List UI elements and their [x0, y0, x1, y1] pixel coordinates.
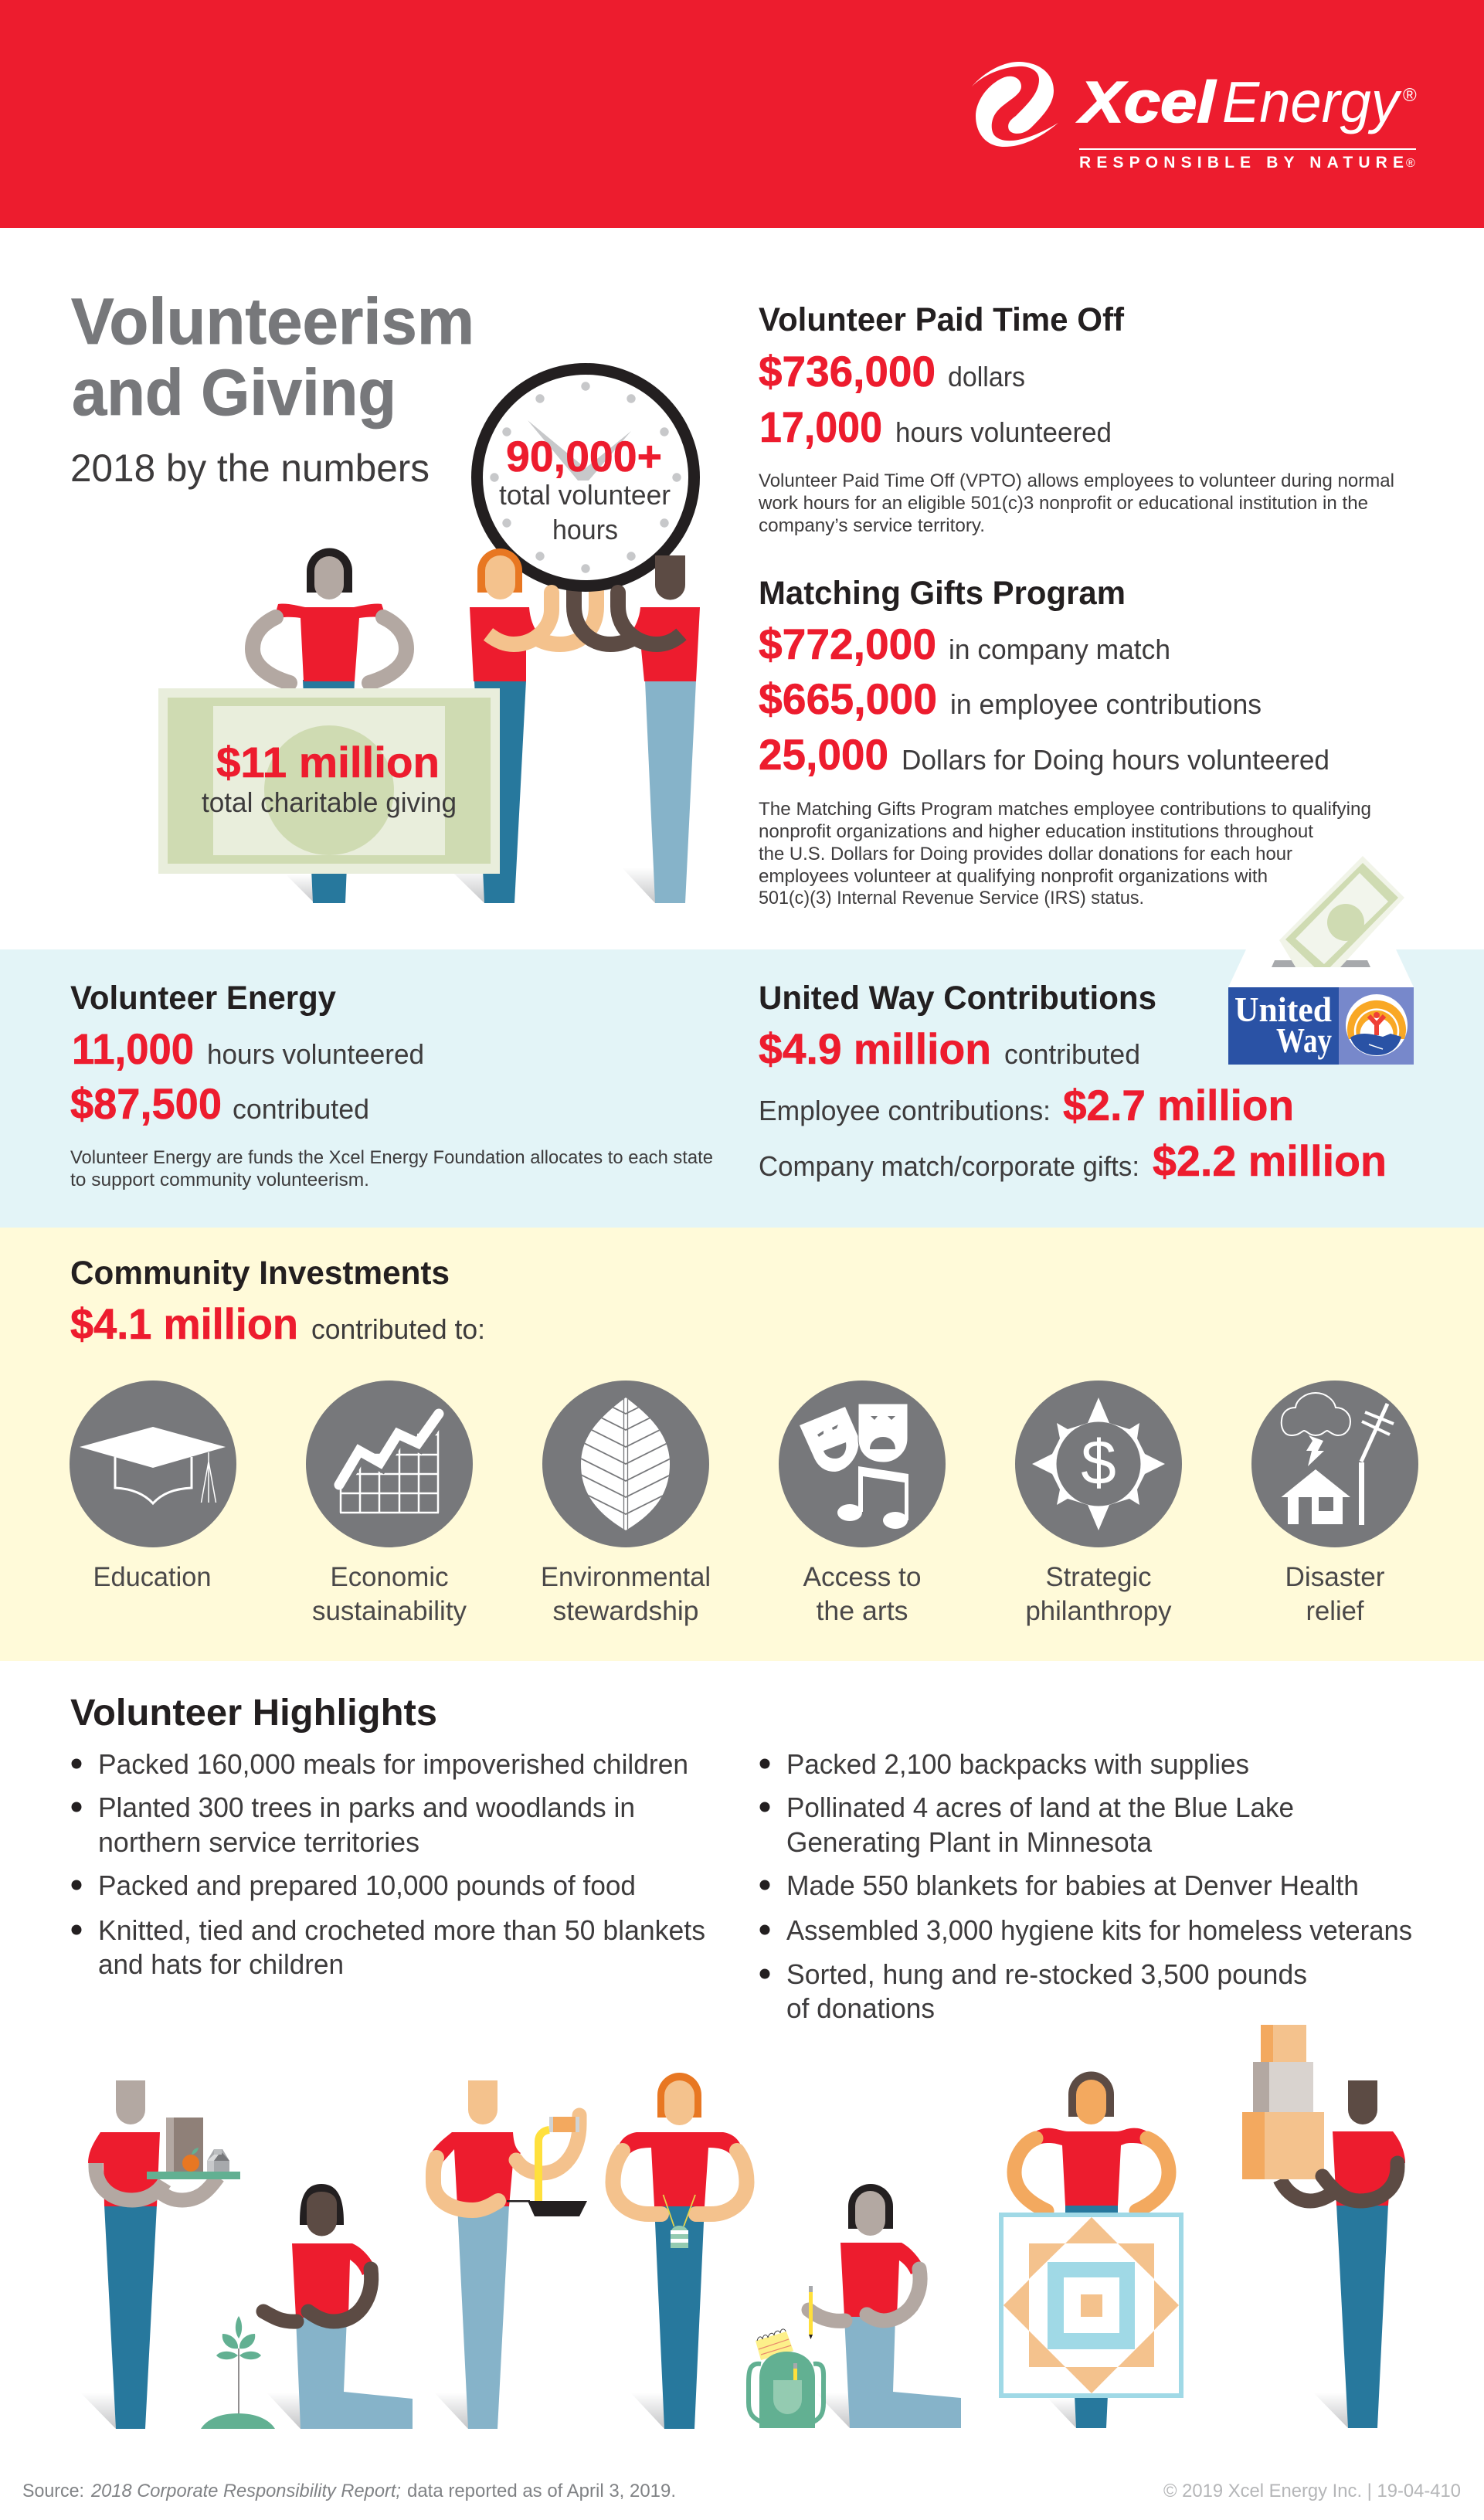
icon: can pouring into pan [507, 2117, 587, 2216]
icon: Environmental stewardship [542, 1381, 709, 1547]
icon: ballot box with United Way logo: Way [1276, 1021, 1332, 1060]
text block: Volunteer Energy: Volunteer Energy are funds the Xcel Energy Foundation allocates to each state [70, 1147, 713, 1168]
list: highlights right column: Generating Plant in Minnesota [786, 1826, 1153, 1858]
title: Volunteerism [71, 285, 474, 358]
labels: contribution categories: Strategic [1046, 1562, 1151, 1592]
figure: person holding quilt [1001, 2072, 1181, 2428]
header band with logo [0, 0, 1484, 228]
labels: contribution categories [93, 1562, 1385, 1626]
icon: Strategic philanthropy: $ [1081, 1428, 1116, 1498]
text block: United Way Contributions: $4.9 million [759, 1024, 991, 1073]
list: highlights left column [71, 1748, 705, 1980]
text block: Matching Gifts Program [759, 575, 1371, 908]
icon: stacked boxes [1242, 2025, 1324, 2179]
figure: right torso and leg [630, 607, 700, 903]
text block: Volunteer Paid Time Off: $736,000 [759, 347, 936, 396]
labels: contribution categories: Economic [331, 1562, 448, 1592]
icon: Economic sustainability [306, 1381, 473, 1547]
icon: Disaster relief [1251, 1381, 1418, 1547]
text block: United Way Contributions: $2.2 million [1153, 1136, 1387, 1185]
icon: grocery bag, fruit and milk on tray [147, 2118, 240, 2179]
text block: Volunteer Paid Time Off: 17,000 [759, 402, 882, 451]
text block: Matching Gifts Program: $665,000 [759, 674, 937, 723]
text block: Volunteer Paid Time Off: work hours for an eligible 501(c)3 nonprofit or educational institution in the [758, 493, 1368, 514]
list: highlights right column: Pollinated 4 acres of land at the Blue Lake [786, 1792, 1294, 1823]
labels: contribution categories: Disaster [1285, 1562, 1385, 1592]
icon: pencil [809, 2286, 813, 2339]
title: and Giving [72, 356, 396, 429]
figure heads [477, 548, 522, 593]
text block: Matching Gifts Program: Dollars for Doing hours volunteered [902, 744, 1329, 776]
list: highlights right column: Made 550 blankets for babies at Denver Health [786, 1870, 1359, 1901]
list: highlights left column: Knitted, tied and crocheted more than 50 blankets [98, 1914, 705, 1946]
text block: Matching Gifts Program: $772,000 [759, 620, 936, 668]
footer: source [22, 2481, 676, 2501]
list: highlights left column: Planted 300 trees in parks and woodlands in [98, 1792, 635, 1823]
icon: seedling [201, 2316, 275, 2429]
clock: 90,000+ [506, 432, 662, 481]
icon: Xcel Energy swirl [972, 62, 1058, 147]
figure: person carrying boxes [1242, 2025, 1405, 2428]
text block: Matching Gifts Program: 25,000 [759, 730, 888, 779]
list: highlights left column: Packed and prepared 10,000 pounds of food [98, 1870, 636, 1901]
clock: total volunteer [499, 479, 671, 511]
panel: community investments: Community Investments [70, 1255, 450, 1292]
logo wordmark: RESPONSIBLE BY NATURE [1079, 154, 1404, 172]
text block: Volunteer Energy: $87,500 [70, 1079, 222, 1128]
text block: United Way Contributions: Company match/corporate gifts: [759, 1150, 1139, 1182]
footer: source: 2018 Corporate Responsibility Report; [90, 2481, 401, 2501]
logo wordmark: Energy [1222, 70, 1402, 134]
labels: contribution categories: Access to [803, 1562, 921, 1592]
bill: $11 million [158, 688, 500, 874]
text block: Volunteer Energy: 11,000 [72, 1024, 194, 1073]
text block: Volunteer Paid Time Off [758, 301, 1394, 536]
text block: Matching Gifts Program: employees volunteer at qualifying nonprofit organizations with [759, 866, 1268, 887]
shadows [454, 868, 655, 903]
labels: contribution categories: stewardship [553, 1596, 698, 1626]
clock: hours [552, 514, 618, 545]
icon: Access to the arts [779, 1381, 946, 1547]
list: highlights right column: Packed 2,100 backpacks with supplies [786, 1748, 1249, 1780]
labels: contribution categories: Education [93, 1562, 212, 1592]
text block: Volunteer Paid Time Off: Volunteer Paid Time Off (VPTO) allows employees to volunteer during normal [759, 470, 1394, 491]
icon: Strategic philanthropy [1015, 1381, 1182, 1547]
illustration: figures holding clock [454, 369, 700, 903]
figure holding bill [253, 548, 406, 903]
icon: ballot box with United Way logo [1228, 856, 1414, 1065]
figure: kneeling person with backpack [749, 2184, 961, 2428]
icon: ballot box with United Way logo: United [1234, 990, 1332, 1029]
panel: community investments [0, 1228, 1484, 1661]
text block: Volunteer Paid Time Off: company’s service territory. [759, 515, 985, 536]
icon: quilt [1001, 2215, 1181, 2396]
text block: Matching Gifts Program: nonprofit organizations and higher education institutions throughout [759, 821, 1313, 842]
text block: Volunteer Energy: contributed [233, 1093, 369, 1125]
icon: knitting needles and hat [663, 2195, 695, 2248]
text block: Volunteer Paid Time Off: Volunteer Paid Time Off [759, 301, 1125, 338]
list: highlights right column: Sorted, hung and re-stocked 3,500 pounds [786, 1958, 1307, 1990]
figure: person planting tree [201, 2184, 413, 2429]
figure: person knitting [613, 2073, 746, 2429]
text block: Volunteer Energy [70, 980, 713, 1190]
labels: contribution categories: Environmental [541, 1562, 711, 1592]
figure: middle torso and leg [470, 607, 539, 903]
text block: Matching Gifts Program: Matching Gifts Program [759, 575, 1126, 612]
panel: blue band [0, 949, 1484, 1228]
text block: Matching Gifts Program: The Matching Gifts Program matches employee contributions to qualifying [759, 799, 1371, 820]
labels: contribution categories: the arts [816, 1596, 908, 1626]
icon: bill dropping in slot [1279, 856, 1404, 967]
title: 2018 by the numbers [70, 447, 430, 490]
text block: Volunteer Energy: Volunteer Energy [70, 980, 336, 1017]
text block: Volunteer Paid Time Off: dollars [948, 361, 1025, 392]
panel: community investments: $4.1 million [70, 1299, 298, 1348]
labels: contribution categories: sustainability [312, 1596, 467, 1626]
bill: $11 million: total charitable giving [202, 786, 457, 818]
text block: Matching Gifts Program: 501(c)(3) Internal Revenue Service (IRS) status. [759, 888, 1144, 908]
heading: Volunteer Highlights: Volunteer Highlights [70, 1693, 437, 1734]
text block: United Way Contributions: Employee contributions: [759, 1095, 1051, 1126]
text block: United Way Contributions: $2.7 million [1063, 1081, 1294, 1129]
logo wordmark: Xcel [1076, 70, 1217, 134]
list: highlights right column: of donations [786, 1992, 935, 2024]
text block: Matching Gifts Program: in company match [949, 633, 1170, 665]
list: highlights right column: Assembled 3,000 hygiene kits for homeless veterans [786, 1914, 1412, 1946]
text block: United Way Contributions [759, 980, 1387, 1185]
title [70, 285, 474, 490]
figure: person with food tray [80, 2080, 240, 2429]
footer: source: data reported as of April 3, 2019. [407, 2481, 676, 2501]
text block: Matching Gifts Program: in employee contributions [950, 688, 1262, 720]
logo wordmark: ® [1406, 157, 1415, 170]
logo wordmark: ® [1403, 85, 1417, 106]
labels: contribution categories: relief [1306, 1596, 1364, 1626]
text block: Volunteer Energy: to support community volunteerism. [70, 1170, 369, 1190]
logo wordmark [1076, 70, 1417, 172]
icon: Education [70, 1381, 236, 1547]
bill: $11 million: $11 million [216, 738, 440, 786]
list: highlights left column: northern service territories [98, 1826, 419, 1858]
footer: source: Source: [22, 2481, 84, 2501]
footer: copyright: © 2019 Xcel Energy Inc. | 19-04-410 [1163, 2481, 1461, 2501]
list: highlights left column: Packed 160,000 meals for impoverished children [98, 1748, 688, 1780]
text block: Volunteer Energy: hours volunteered [207, 1038, 424, 1070]
text block: Matching Gifts Program: the U.S. Dollars for Doing provides dollar donations for each hour [759, 844, 1292, 864]
icon: backpack with notepad [749, 2329, 824, 2428]
text block: Volunteer Paid Time Off: hours volunteered [895, 416, 1112, 448]
labels: contribution categories: philanthropy [1026, 1596, 1172, 1626]
figure: person cooking [430, 2080, 587, 2429]
clock [477, 369, 694, 586]
text block: United Way Contributions: United Way Contributions [759, 980, 1156, 1017]
panel: community investments: contributed to: [311, 1313, 485, 1345]
text block: United Way Contributions: contributed [1004, 1038, 1140, 1070]
list: highlights right column [760, 1748, 1412, 2024]
list: highlights left column: and hats for children [98, 1948, 344, 1980]
